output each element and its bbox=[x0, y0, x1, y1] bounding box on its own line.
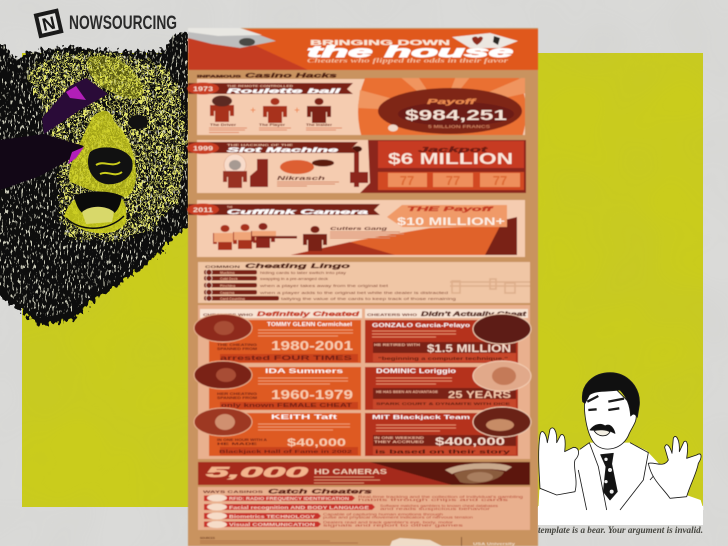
bear magenta highlight bbox=[66, 86, 86, 164]
row: facial recognition: and reads suspicious behavior bbox=[380, 507, 492, 511]
card: Carmichael: 1980-2001 bbox=[271, 339, 353, 353]
row: biometrics bbox=[204, 512, 473, 520]
illustration: bear bbox=[0, 30, 200, 326]
card: MIT Blackjack Team: $400,000 bbox=[435, 436, 505, 448]
lingo rows: Cold Deck bbox=[220, 277, 238, 281]
row: facial recognition: Software matches gamblers to known cheat databases bbox=[380, 504, 498, 508]
university text: USA University bbox=[473, 541, 516, 546]
heading: COMMON bbox=[205, 265, 241, 269]
heading: WAYS CASINOS bbox=[203, 490, 264, 494]
heading: didn't actually cheat: CHEATERS WHO bbox=[367, 313, 417, 317]
slot machine body bbox=[360, 140, 526, 193]
figures: dealer, player, insider: + bbox=[294, 105, 300, 115]
lingo rows: tallying the value of the cards to keep track of those remaining bbox=[281, 297, 456, 301]
panel background bbox=[197, 140, 525, 193]
ribbon: slot machine title: Slot Machine bbox=[227, 147, 339, 154]
card: MIT Blackjack Team: is based on their story bbox=[375, 450, 512, 456]
roulette wheel rays bbox=[358, 78, 526, 136]
handle knob bbox=[352, 146, 362, 152]
panel: common cheating lingo: Cheating Lingo bbox=[245, 263, 350, 270]
bear open mouth bbox=[74, 192, 122, 214]
card: Ida Summers: SPANNED FROM bbox=[217, 396, 257, 400]
footer divider bbox=[461, 537, 462, 546]
jackpot label: Jackpot bbox=[418, 147, 489, 154]
card: Keith Taft: $40,000 bbox=[287, 437, 346, 449]
sources text: SOURCES bbox=[200, 536, 215, 540]
icon: N square: N bbox=[40, 13, 57, 35]
card: MIT Blackjack Team: IN ONE WEEKEND bbox=[374, 436, 425, 440]
caption: Cutters Gang bbox=[330, 226, 404, 238]
logo wordmark: NOWSOURCING bbox=[69, 13, 177, 34]
panel background bbox=[198, 487, 530, 530]
panel: cufflink camera bbox=[187, 200, 525, 257]
reels: sevens: 77 bbox=[446, 173, 460, 188]
heading: infamous casino hacks: Casino Hacks bbox=[245, 72, 338, 80]
meme face bbox=[585, 388, 636, 449]
payoff note: 5 MILLION FRANCS bbox=[428, 124, 490, 129]
ribbon: cufflink camera title: Cufflink Camera bbox=[227, 209, 369, 216]
bubble: Nikrasch: Nikrasch bbox=[277, 176, 325, 182]
ribbon: roulette ball title: Roulette ball bbox=[227, 88, 341, 95]
infographic tan background bbox=[188, 28, 538, 546]
payoff inner ellipse bbox=[398, 102, 514, 126]
card: Garcia-Pelayo: HE RETIRED WITH bbox=[374, 343, 421, 347]
ribbon: slot machine title: 1999 bbox=[193, 146, 214, 152]
caption: Cutters Gang: Cutters Gang bbox=[330, 226, 387, 231]
bear forehead highlight bbox=[87, 56, 144, 99]
payoff label: Payoff bbox=[427, 99, 476, 106]
card: Loriggio: 25 YEARS bbox=[448, 390, 511, 401]
icon: dome camera bbox=[445, 463, 512, 484]
card: Garcia-Pelayo: $1.5 MILLION bbox=[427, 343, 511, 355]
row: visual bbox=[204, 520, 464, 528]
icon: security camera bbox=[188, 28, 276, 48]
heading: infamous casino hacks bbox=[197, 72, 338, 80]
card: Garcia-Pelayo: GONZALO Garcia-Pelayo bbox=[372, 323, 471, 329]
stat label: HD CAMERAS bbox=[314, 467, 387, 476]
bear grey fur hatching bbox=[0, 32, 188, 318]
card: Keith Taft: IN ONE HOUR WITH A bbox=[217, 438, 268, 442]
meme eyebrows and eyes bbox=[587, 396, 624, 410]
card: Keith Taft: HE MADE bbox=[217, 442, 259, 446]
meme jacket lapels bbox=[578, 443, 662, 510]
card: MIT Blackjack Team: MIT Blackjack Team bbox=[372, 415, 470, 421]
icon: roulette ball bbox=[388, 124, 398, 132]
panel: slot machine bbox=[187, 140, 526, 193]
orange wedge bbox=[291, 226, 500, 255]
meme suit bbox=[538, 443, 703, 510]
lingo rows: Capping bbox=[220, 291, 234, 295]
card: Keith Taft: KEITH Taft bbox=[271, 415, 337, 421]
row: biometrics: pulse and physical movement indicators of nervous tension bbox=[323, 516, 473, 520]
source lines bbox=[200, 541, 358, 543]
card: Ida Summers: 1960-1979 bbox=[271, 388, 353, 402]
tie dots bbox=[604, 458, 614, 494]
lingo rows: Mucking bbox=[220, 271, 235, 275]
ribbon: cufflink camera title: THE bbox=[227, 205, 233, 209]
card: Loriggio: DOMINIC Loriggio bbox=[376, 369, 456, 375]
reels: sevens: 77 bbox=[493, 173, 507, 188]
lingo rows: Card Counting bbox=[220, 297, 245, 301]
slot machine handle bbox=[350, 150, 368, 187]
lingo rows: hiding cards to later switch into play bbox=[260, 271, 346, 275]
row: visual: Visual COMMUNICATION bbox=[229, 522, 315, 527]
banner left field bbox=[198, 462, 530, 485]
row: facial recognition: Facial recognition AND BODY LANGUAGE bbox=[229, 505, 369, 510]
bear nostril marks bbox=[96, 162, 122, 174]
figure: hacker at machine bbox=[223, 154, 268, 188]
lingo rows: swapping in a pre-arranged deck bbox=[260, 277, 328, 281]
banner: 5,000 HD cameras bbox=[198, 462, 530, 485]
lingo rows: when a player takes away from the original bet bbox=[260, 284, 388, 288]
figures: dealer, player, insider: + bbox=[250, 105, 256, 115]
card: Carmichael: arrested FOUR TIMES bbox=[220, 356, 352, 362]
bear tongue bbox=[82, 207, 114, 224]
header red wedge bbox=[188, 36, 308, 70]
meme left hand bbox=[539, 428, 579, 495]
section background bbox=[198, 305, 530, 459]
figure captions: The Insider bbox=[306, 123, 333, 127]
stat number: 5,000 bbox=[206, 464, 310, 481]
heading: definitely cheated: Definitely Cheated bbox=[257, 312, 360, 318]
card: Keith Taft: Blackjack Hall of Fame in 2002 bbox=[219, 449, 353, 455]
header banner bbox=[188, 28, 538, 70]
lingo rows: Pinching bbox=[220, 284, 235, 288]
bear lip bbox=[66, 216, 124, 228]
row: facial recognition bbox=[204, 504, 498, 511]
row: RFID: RFID: RADIO FREQUENCY IDENTIFICATION bbox=[229, 496, 349, 501]
meme caption text: template is a bear. Your argument is invalid. bbox=[538, 526, 703, 536]
row: biometrics: Biometrics TECHNOLOGY bbox=[229, 514, 315, 519]
card: Loriggio: HE HAS BEEN AN ADVANTAGE bbox=[376, 390, 439, 394]
meme mouth bbox=[594, 430, 610, 436]
bear purple lightning lower bbox=[0, 134, 84, 190]
card: MIT Blackjack Team bbox=[365, 407, 531, 456]
icon: N square bbox=[34, 8, 64, 38]
reels: sevens: 77 bbox=[400, 173, 414, 188]
yellow slide panel bbox=[22, 53, 703, 507]
row: RFID: habits through chips and cards bbox=[358, 498, 509, 502]
panel background bbox=[197, 200, 525, 257]
bear muzzle bbox=[64, 198, 126, 234]
row: RFID bbox=[204, 494, 523, 502]
heading: didn't actually cheat bbox=[365, 309, 528, 318]
meme right hand bbox=[648, 436, 701, 498]
card: Carmichael: THE CHEATING bbox=[217, 343, 257, 347]
row: RFID: Real-time tracking and the collection of individual's gambling bbox=[358, 495, 523, 499]
bear nose bbox=[88, 147, 133, 184]
card: Garcia-Pelayo: "beginning a computer technique." bbox=[378, 356, 508, 361]
icon: playing cards bbox=[452, 33, 518, 48]
heading: the house: the house bbox=[307, 44, 513, 61]
subheading: Cheaters who flipped the odds in their favor bbox=[307, 58, 509, 64]
payoff amount: $10 MILLION+ bbox=[397, 216, 505, 228]
card: Ida Summers: IDA Summers bbox=[265, 369, 344, 375]
lingo rows bbox=[204, 269, 456, 301]
bear purple lightning stripe bbox=[42, 78, 108, 134]
card: MIT Blackjack Team: THEY ACCRUED bbox=[374, 440, 425, 444]
banner dark field bbox=[370, 462, 530, 485]
jackpot panel bbox=[378, 141, 524, 168]
card: Carmichael bbox=[194, 314, 361, 363]
ribbon: cufflink camera title: 2011 bbox=[193, 207, 214, 214]
ribbon: roulette ball title bbox=[187, 82, 353, 95]
card: Carmichael: TOMMY GLENN Carmichael bbox=[267, 322, 353, 328]
dark slot graphic bbox=[470, 217, 517, 255]
lingo rows: when a player adds to the original bet while the dealer is distracted bbox=[260, 291, 448, 295]
ribbon: roulette ball title: THE REMOTE CONTROLLED bbox=[227, 84, 293, 88]
card: Carmichael: SPANNED FROM bbox=[217, 347, 257, 351]
ribbon: cufflink camera title bbox=[187, 204, 380, 216]
logo: NowSourcing bbox=[34, 8, 177, 38]
meme: man with raised hands bbox=[538, 373, 703, 536]
heading: bringing down: BRINGING DOWN bbox=[310, 38, 450, 47]
caption body lines bbox=[209, 128, 342, 132]
row: visual: Dealers read and track gambler's eye, body, motor bbox=[323, 520, 454, 524]
bear yellow fur highlights bbox=[24, 52, 186, 240]
card: Garcia-Pelayo bbox=[365, 314, 531, 363]
reels: sevens bbox=[388, 173, 520, 188]
heading: infamous casino hacks: INFAMOUS bbox=[197, 74, 243, 78]
ribbon: slot machine title: THE HACKING OF THE bbox=[227, 143, 293, 147]
bubble: Nikrasch bbox=[277, 160, 339, 186]
panel: ways casinos catch cheaters bbox=[198, 487, 530, 530]
card: Ida Summers: only known FEMALE CHEAT bbox=[221, 403, 353, 409]
heading: definitely cheated bbox=[200, 309, 362, 318]
panel background bbox=[198, 262, 530, 303]
meme moustache bbox=[590, 424, 615, 433]
figure captions: The Driver bbox=[210, 123, 237, 127]
bear right eye bbox=[128, 115, 148, 129]
card: Loriggio: SPARK COURT & DYNAMITE WITH DICE bbox=[376, 402, 511, 406]
panel: cheaters comparison bbox=[194, 305, 531, 459]
reels strip bbox=[378, 172, 524, 190]
figure captions: The Player bbox=[259, 123, 286, 127]
infographic: Bringing Down the House bbox=[187, 28, 540, 546]
meme hair bbox=[582, 373, 639, 417]
jackpot amount: $6 MILLION bbox=[388, 151, 513, 168]
payoff amount: $984,251 bbox=[405, 108, 507, 124]
stat description bbox=[314, 477, 380, 483]
faded shoe graphic bbox=[450, 279, 530, 293]
sponsor logo bbox=[390, 538, 442, 546]
card: Ida Summers: HER CHEATING bbox=[217, 392, 257, 396]
panel: ways casinos catch cheaters: Catch Cheaters bbox=[268, 488, 373, 496]
panel: roulette ball bbox=[186, 78, 526, 136]
card: Loriggio bbox=[365, 361, 531, 410]
bear silhouette bbox=[0, 30, 200, 326]
card: Keith Taft bbox=[194, 408, 361, 456]
red wedge bbox=[291, 242, 395, 255]
payoff arrow bbox=[387, 205, 507, 227]
meme tie bbox=[601, 453, 617, 500]
heading: didn't actually cheat: Didn't Actually Cheat bbox=[421, 312, 528, 318]
payoff dark ellipse bbox=[378, 88, 522, 134]
row: biometrics: Capable of capturing human emotions through bbox=[323, 512, 443, 516]
figures: gang members bbox=[213, 223, 327, 251]
bear snout bbox=[69, 111, 136, 197]
ribbon: roulette ball title: 1973 bbox=[193, 86, 214, 93]
payoff label: THE Payoff bbox=[407, 206, 494, 213]
panel: common cheating lingo bbox=[198, 262, 530, 303]
heading: definitely cheated: CHEATERS WHO bbox=[203, 313, 253, 317]
footer: sources and logos bbox=[200, 536, 516, 546]
ribbon: slot machine title bbox=[187, 142, 358, 154]
figure captions bbox=[210, 123, 333, 127]
header orange field bbox=[188, 29, 538, 70]
row: visual: signals and report to other games bbox=[323, 524, 464, 528]
card: Ida Summers bbox=[194, 361, 361, 410]
panel background bbox=[197, 79, 525, 135]
figures: dealer, player, insider bbox=[210, 96, 331, 123]
white caption block bbox=[538, 506, 703, 525]
